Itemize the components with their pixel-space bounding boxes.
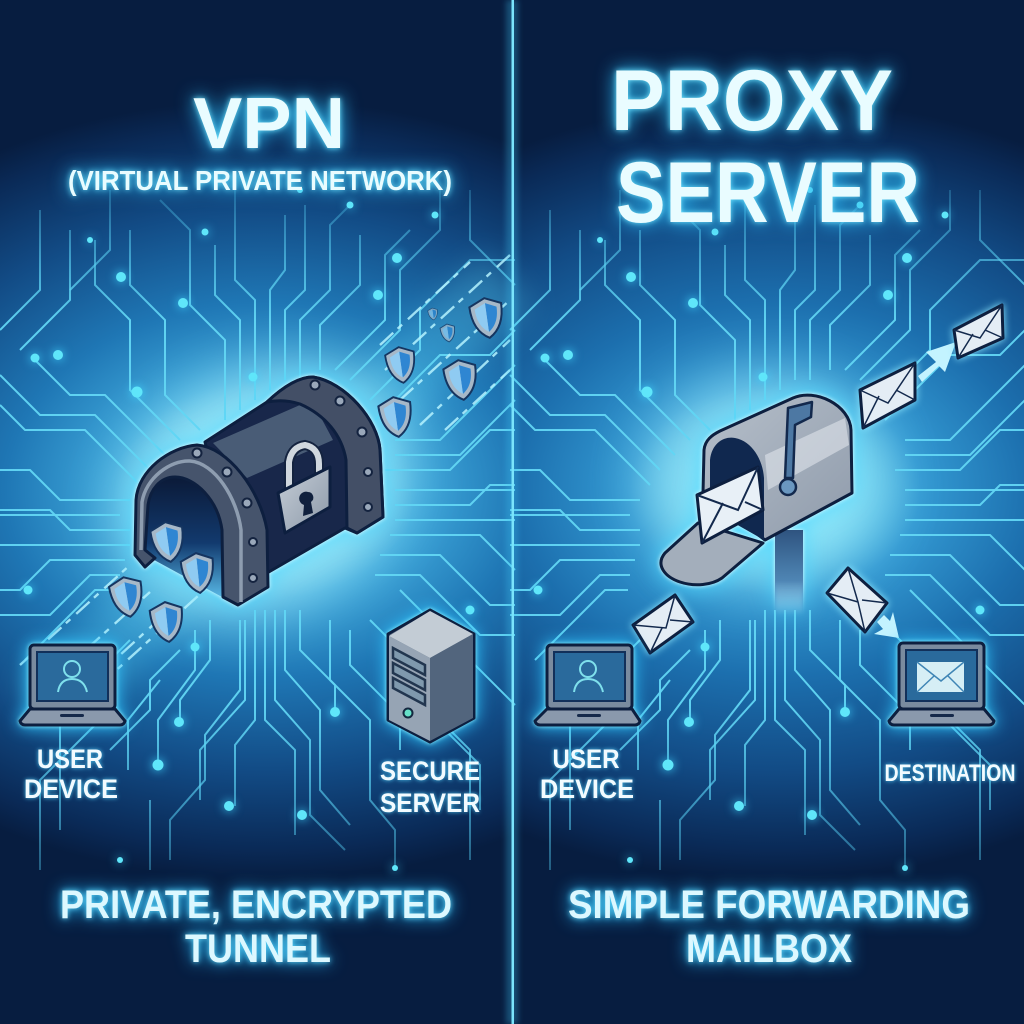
label: user device left: USER: [37, 744, 103, 774]
icon: destination laptop: [889, 643, 994, 725]
front arch band: [135, 445, 268, 605]
tunnel opening: [145, 477, 222, 597]
title: Proxy Server: [611, 53, 920, 241]
envelope: far upper right: [954, 305, 1003, 358]
shields entering tunnel: [108, 520, 216, 644]
label: user device right: USER: [552, 744, 620, 774]
circuit traces: right panel: [510, 190, 1024, 870]
label: secure server: [380, 756, 480, 818]
mailbox post: [775, 530, 803, 615]
icon: secure server: [388, 610, 474, 742]
envelope: leaving mailbox: [860, 363, 915, 428]
envelope: lower right: [827, 568, 887, 632]
mailbox body: [703, 395, 852, 540]
background: left panel: [0, 0, 512, 1024]
caption: simple forwarding mailbox: SIMPLE FORWARDING: [568, 883, 970, 927]
rivets: [192, 380, 372, 582]
icon: mailbox: [661, 395, 852, 615]
caption: simple forwarding mailbox: MAILBOX: [686, 927, 852, 971]
central halo: mailbox: [645, 375, 885, 585]
label: secure server: SERVER: [380, 788, 480, 818]
envelope: from user device: [633, 595, 693, 653]
caption: private encrypted tunnel: PRIVATE, ENCRYPTED: [60, 883, 452, 927]
encrypted data stream: [20, 255, 510, 705]
envelope entering mailbox: [697, 467, 763, 543]
arrow: to upper envelope: [918, 342, 956, 382]
title: Proxy Server: SERVER: [616, 145, 920, 241]
glowing nodes: left panel: [24, 187, 474, 871]
icon: secure tunnel with padlock: [135, 377, 383, 605]
title: VPN: VPN: [193, 84, 345, 164]
center divider: [506, 0, 518, 1024]
icon: proxy side user laptop: [535, 645, 640, 725]
mailbox flag: [785, 402, 812, 478]
caption: private encrypted tunnel: [60, 883, 452, 971]
label: user device right: [540, 744, 634, 804]
background: right panel: [512, 0, 1024, 1024]
light stream glow: left panel: [40, 280, 510, 710]
label: user device left: [24, 744, 118, 804]
glowing nodes: right panel: [534, 187, 984, 871]
arrow: to destination: [874, 612, 899, 638]
tunnel body: [205, 377, 383, 573]
label: user device left: DEVICE: [24, 774, 118, 804]
central halo: tunnel: [76, 318, 448, 662]
caption: simple forwarding mailbox: [568, 883, 970, 971]
icon: left user laptop: [20, 645, 125, 725]
title: Proxy Server: PROXY: [611, 53, 893, 149]
shields leaving tunnel: [377, 296, 506, 439]
back arch band: [267, 377, 383, 533]
label: secure server: SECURE: [380, 756, 480, 786]
label: user device right: DEVICE: [540, 774, 634, 804]
subtitle: Virtual Private Network: (VIRTUAL PRIVATE NETWORK): [68, 165, 452, 196]
padlock: [278, 445, 330, 533]
mailbox interior: [710, 438, 764, 540]
mailbox door: [661, 523, 763, 585]
circuit traces: left panel: [0, 190, 515, 870]
caption: private encrypted tunnel: TUNNEL: [185, 927, 331, 971]
